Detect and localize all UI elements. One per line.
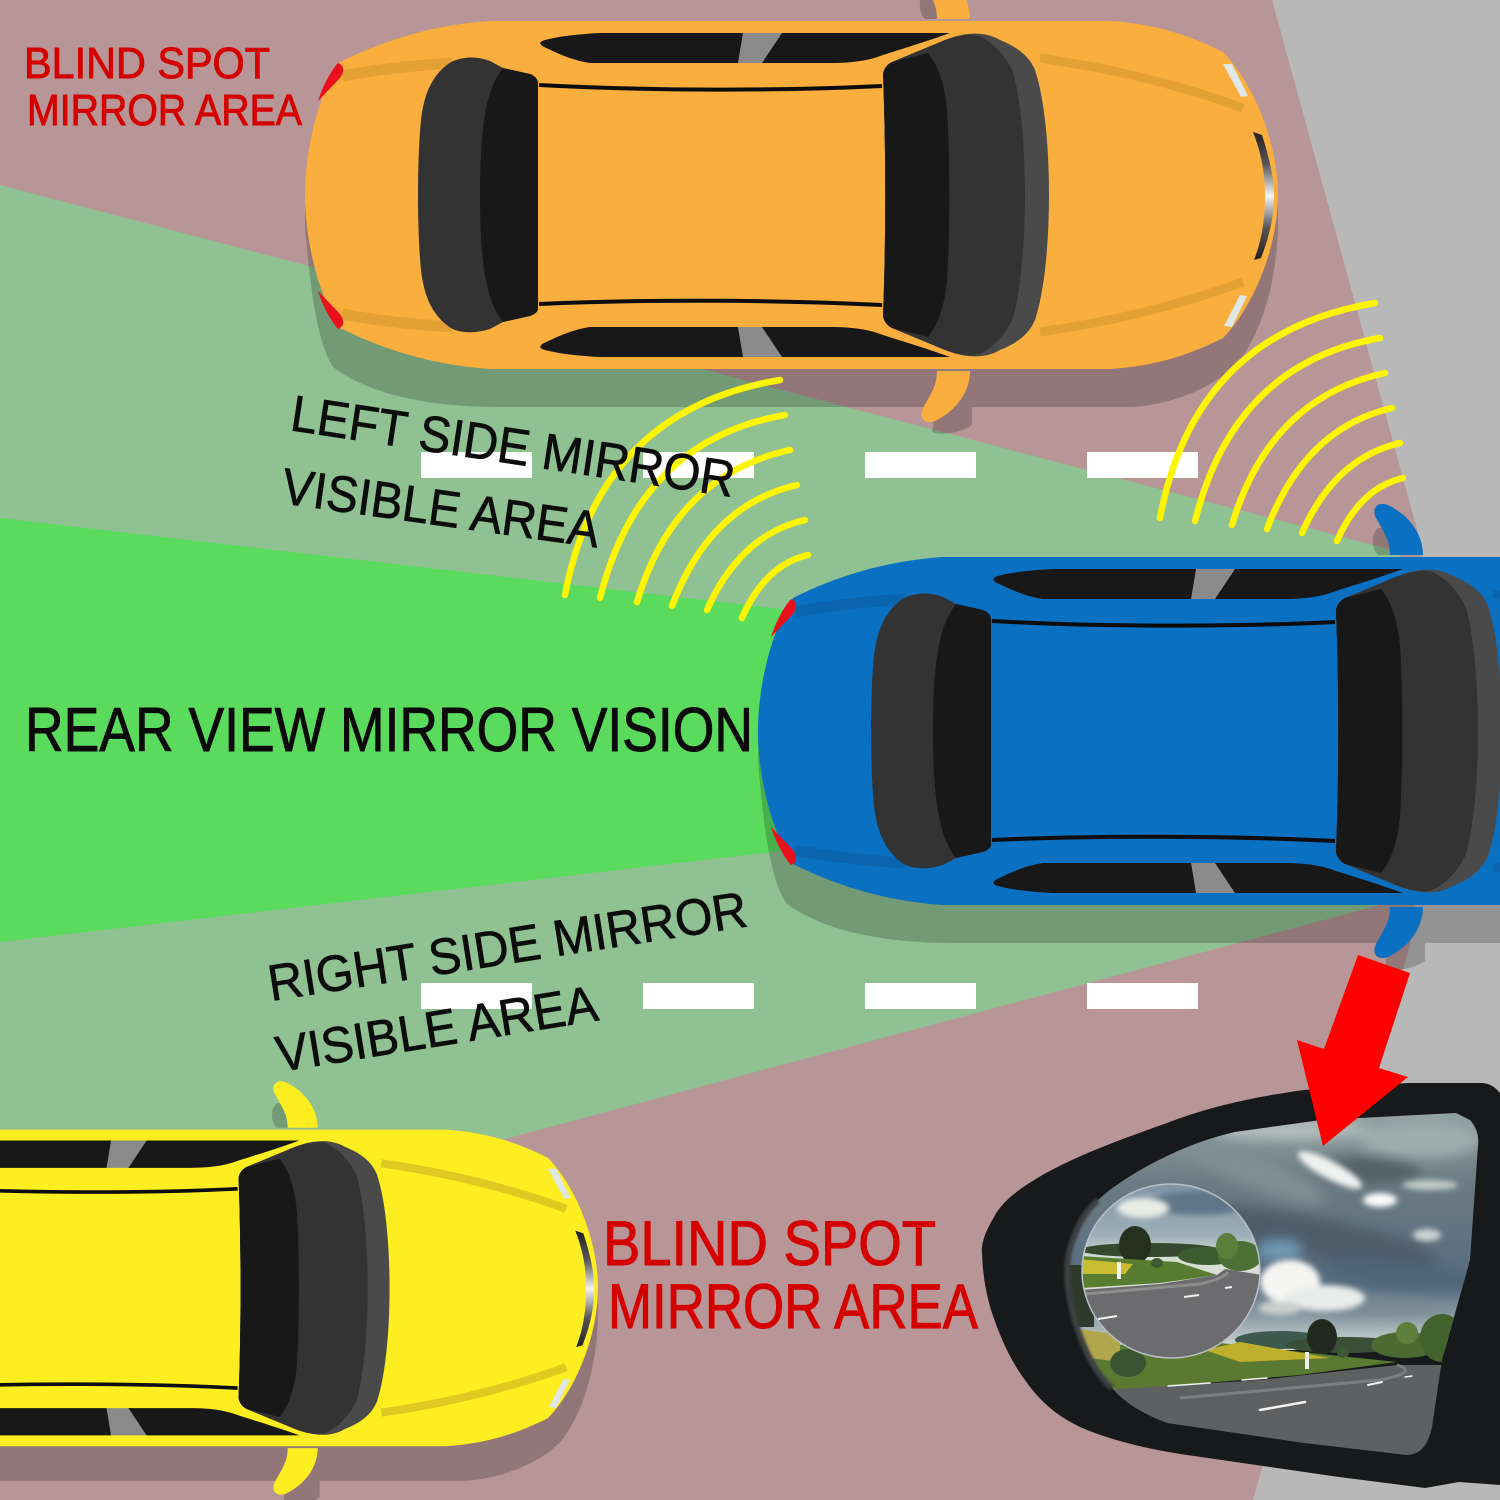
rear view mirror vision area — [0, 518, 790, 942]
sensor waves: right group — [1160, 303, 1403, 541]
side mirror with blind spot lens — [982, 1083, 1500, 1488]
sensor waves: left group — [565, 380, 808, 618]
label: blind spot mirror area bottom: MIRROR AREA — [608, 1272, 978, 1342]
lens road — [1080, 1269, 1262, 1362]
side mirror visible area — [0, 185, 1400, 1280]
label: blind spot mirror area bottom: BLIND SPOT — [603, 1209, 936, 1279]
label: rear view mirror vision: REAR VIEW MIRROR VISION — [25, 696, 753, 765]
label: blind spot mirror area top: MIRROR AREA — [27, 86, 303, 135]
grass and field — [1092, 1343, 1396, 1390]
yellow car — [0, 1081, 598, 1500]
label: right side mirror visible area: VISIBLE AREA — [272, 975, 602, 1083]
storm clouds — [1159, 1120, 1481, 1315]
grey road shoulder — [1253, 0, 1500, 1500]
red arrow pointing to mirror — [1297, 955, 1410, 1146]
glass rim — [1067, 1200, 1112, 1388]
label: left side mirror visible area: LEFT SIDE MIRROR — [287, 385, 739, 508]
lens grass — [1080, 1256, 1217, 1288]
blind spot convex lens — [1082, 1184, 1260, 1358]
orange car — [305, 0, 1278, 434]
road — [1114, 1365, 1442, 1455]
lane dashes — [421, 452, 1198, 1009]
mirror housing — [982, 1083, 1500, 1488]
distant trees — [1060, 1265, 1464, 1362]
label: left side mirror visible area: VISIBLE AREA — [278, 457, 603, 558]
blue car — [758, 504, 1500, 970]
lens tree line — [1080, 1226, 1262, 1271]
label: left side mirror visible area — [278, 385, 739, 558]
label: right side mirror visible area — [264, 881, 751, 1083]
label: right side mirror visible area: RIGHT SIDE MIRROR — [264, 881, 751, 1012]
label: blind spot mirror area top: BLIND SPOT — [24, 39, 270, 88]
mirror glass scene — [1060, 1110, 1490, 1470]
